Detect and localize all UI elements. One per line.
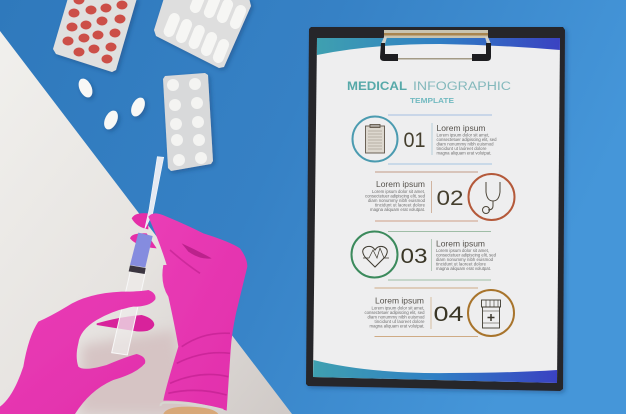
clip	[380, 30, 491, 61]
syringe stopper	[129, 265, 146, 274]
paper	[313, 38, 560, 383]
step 02	[365, 172, 514, 221]
clip bar	[384, 30, 488, 38]
text block: magna aliquam erat volutpat.	[436, 150, 492, 156]
text block: tincidunt ut laoreet dolore	[436, 262, 487, 266]
blister pack: white capsules	[154, 0, 251, 68]
title: TEMPLATE	[410, 98, 454, 105]
text block: Lorem ipsum	[375, 296, 424, 306]
white triangle surface	[0, 31, 292, 414]
capsules	[162, 0, 248, 65]
text block: Lorem ipsum dolor sit amet,	[436, 248, 489, 253]
text block: Lorem ipsum dolor sit amet,	[436, 132, 490, 138]
text block: consectetuer adipiscing elit, sed	[364, 310, 425, 315]
text block: magna aliquam erat volutpat.	[370, 324, 424, 328]
right hand	[148, 213, 247, 411]
text block: Lorem ipsum	[376, 180, 425, 189]
clipboard board	[306, 27, 565, 391]
rules	[374, 288, 478, 336]
text block	[365, 180, 426, 212]
clip arms	[381, 37, 491, 44]
right hand creases	[168, 250, 230, 395]
text block: tincidunt ut laoreet dolore	[436, 146, 487, 151]
icon: heart	[352, 232, 398, 278]
tablets	[167, 78, 207, 166]
number: 03	[400, 245, 428, 268]
step 01	[352, 115, 497, 164]
text block: diam nonummy nibh euismod	[368, 314, 425, 320]
rules	[388, 232, 491, 280]
rules	[388, 115, 492, 164]
number: 02	[436, 187, 464, 210]
text block	[436, 240, 497, 271]
syringe barrel	[112, 270, 145, 355]
text block: diam nonummy nibh euismod	[368, 198, 426, 203]
text block: diam nonummy nibh euismod	[436, 142, 494, 146]
loose pills	[76, 76, 148, 132]
step 04	[364, 288, 514, 336]
icon: stethoscope	[468, 174, 514, 220]
text block: Lorem ipsum	[436, 124, 486, 133]
hand shadow on surface	[80, 330, 190, 414]
red pills	[62, 0, 128, 64]
footer band	[313, 360, 557, 383]
clipboard	[306, 27, 565, 391]
syringe plunger rod	[145, 157, 164, 229]
text block: consectetuer adipiscing elit, sed	[436, 252, 497, 258]
title	[347, 81, 511, 105]
text block: magna aliquam erat volutpat.	[436, 266, 491, 271]
syringe blue liquid	[130, 233, 153, 267]
text block: magna aliquam erat volutpat.	[370, 207, 425, 212]
step 03	[352, 232, 497, 280]
hands and syringe	[0, 157, 247, 414]
icon: medicine bottle	[468, 290, 514, 336]
text block: Lorem ipsum	[436, 240, 485, 248]
title: INFOGRAPHIC	[413, 81, 511, 93]
text block	[364, 296, 425, 328]
title: MEDICAL	[347, 81, 407, 93]
blister pack: round tablets	[163, 73, 213, 171]
blister pack: red pills	[53, 0, 137, 72]
number: 01	[404, 129, 426, 152]
syringe	[112, 157, 164, 355]
bracelet and wrist	[161, 403, 223, 414]
text block: Lorem ipsum dolor sit amet,	[372, 189, 425, 194]
text block: diam nonummy nibh euismod	[436, 257, 494, 262]
number: 04	[434, 303, 464, 326]
left hand middle finger	[97, 315, 154, 332]
rules	[375, 172, 478, 221]
header band	[317, 38, 560, 55]
text block: tincidunt ut laoreet dolore	[374, 319, 425, 324]
text block: tincidunt ut laoreet dolore	[375, 202, 426, 208]
left hand	[0, 290, 156, 414]
text block	[436, 124, 497, 156]
icon: clipboard	[352, 116, 398, 162]
text block: consectetuer adipiscing elit, sed	[365, 194, 426, 198]
clip legs	[380, 43, 398, 61]
right hand rear fingers	[130, 213, 157, 248]
right hand palm shadow	[182, 243, 212, 259]
text block: consectetuer adipiscing elit, sed	[436, 137, 497, 142]
text block: Lorem ipsum dolor sit amet,	[372, 306, 424, 310]
